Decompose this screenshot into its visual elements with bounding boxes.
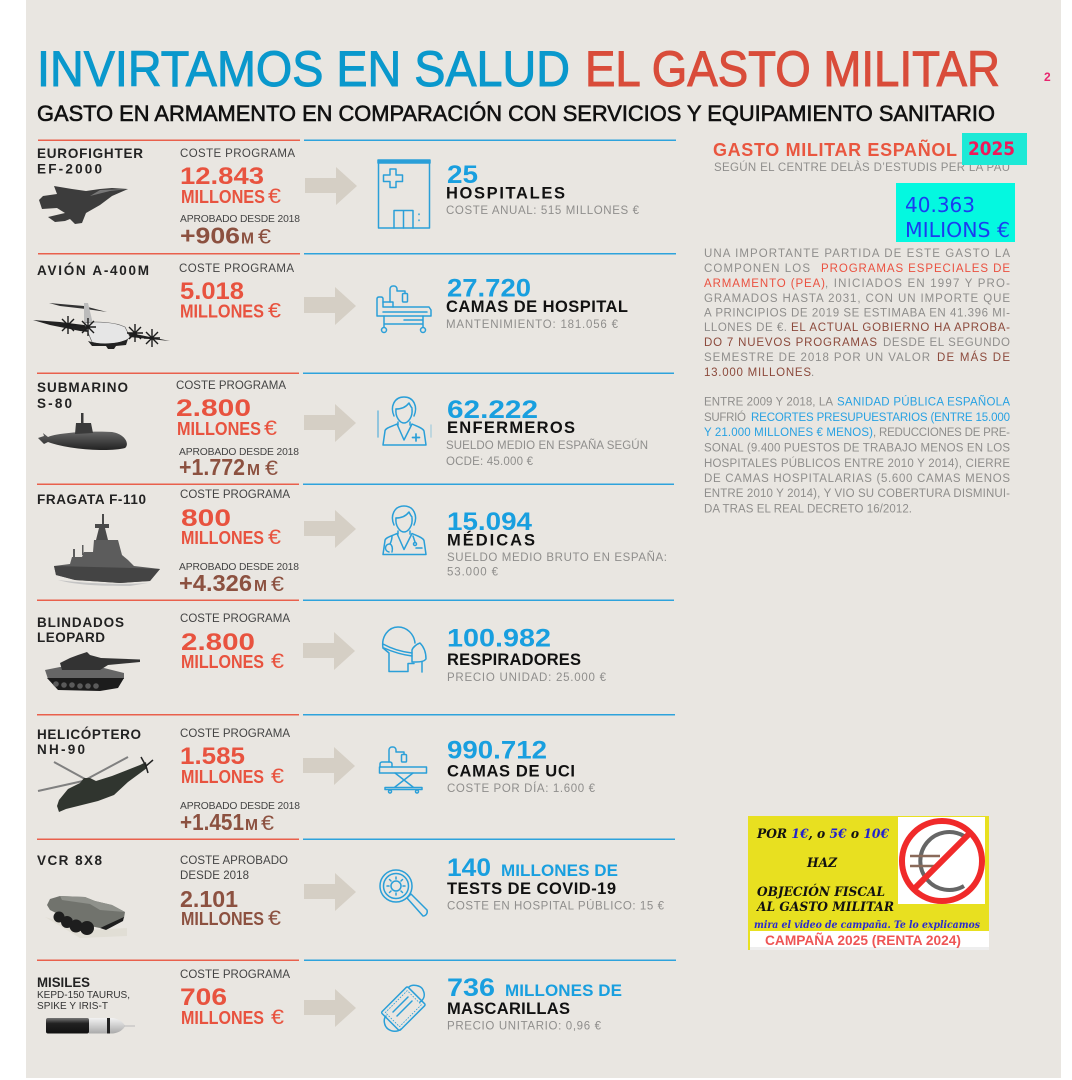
cost: €: [271, 765, 284, 788]
weapon name: LEOPARD: [37, 630, 105, 645]
cost: APROBADO DESDE 2018: [180, 801, 300, 812]
cost: [180, 855, 288, 930]
weapon name: S-80: [37, 396, 72, 411]
cost: M: [254, 578, 267, 595]
text block: PEA paragraph: DESDE EL SEGUNDO: [883, 337, 1010, 349]
row: Misiles: [37, 969, 622, 1034]
row: Eurofighter: [37, 146, 640, 248]
benefit: UCI: COSTE POR DÍA: 1.600 €: [447, 782, 596, 795]
banner text: mira el video de campaña. Te lo explicamos: [754, 920, 980, 931]
text block: PEA paragraph: .: [811, 367, 814, 379]
arrow: [304, 404, 356, 442]
arrow: [304, 989, 356, 1027]
benefit: camas: [446, 275, 628, 331]
year badge: [962, 133, 1027, 165]
weapon name: [37, 615, 124, 645]
banner text: OBJECIÓN FISCAL: [757, 883, 885, 900]
icon: hospital: [378, 160, 430, 228]
benefit: mascarillas: PRECIO UNITARIO: 0,96 €: [447, 1021, 602, 1033]
benefit: enfermeros: OCDE: 45.000 €: [446, 456, 534, 468]
cost: MILLONES: [181, 652, 264, 672]
cost: MILLONES: [180, 302, 264, 322]
cost: MILLONES: [181, 1008, 264, 1028]
title: [37, 41, 1000, 97]
year badge: 2025: [968, 138, 1015, 160]
text block: PEA paragraph: UNA IMPORTANTE PARTIDA DE ESTE GASTO LA: [704, 248, 1010, 260]
weapon name: HELICÓPTERO: [37, 727, 141, 742]
text block: PEA paragraph: PROGRAMAS ESPECIALES DE: [821, 263, 1010, 275]
cost: [180, 148, 300, 248]
weapon name: FRAGATA F-110: [37, 492, 146, 507]
banner text: AL GASTO MILITAR: [755, 900, 894, 915]
cost: €: [268, 300, 281, 322]
benefit: respiradores: RESPIRADORES: [447, 651, 581, 669]
banner: objeción fiscal: [748, 816, 989, 950]
cost: +906: [180, 222, 240, 248]
weapon name: SPIKE Y IRIS-T: [37, 1001, 108, 1012]
panel: gasto militar heading: [713, 133, 1027, 174]
cost: 12.843: [180, 163, 264, 190]
cost: +1.451: [180, 809, 244, 835]
cost: M: [241, 230, 254, 248]
cost: 2.800: [181, 629, 255, 656]
cost: €: [265, 457, 278, 480]
benefit: enfermeros: 62.222: [447, 396, 538, 424]
title: INVIRTAMOS EN SALUD: [37, 41, 570, 97]
benefit: hospitales: 25: [447, 161, 478, 189]
plane image: [33, 303, 170, 349]
row: A-400M: [33, 263, 628, 349]
cost: COSTE PROGRAMA: [180, 969, 290, 981]
cost: MILLONES: [181, 767, 264, 787]
benefit: tests: TESTS DE COVID-19: [447, 880, 616, 898]
cost: €: [271, 1006, 284, 1029]
cost: 706: [180, 984, 227, 1011]
banner text: HAZ: [806, 856, 837, 871]
weapon name: KEPD-150 TAURUS,: [37, 990, 130, 1001]
title: EL GASTO MILITAR: [585, 41, 1000, 97]
cost: [180, 613, 290, 673]
benefit: tests: 140: [447, 854, 491, 882]
text block: PEA paragraph: , INICIADOS EN 1997 Y PRO-: [825, 278, 1010, 290]
benefit: medicas: 15.094: [447, 508, 532, 536]
cost: DESDE 2018: [180, 870, 249, 882]
cost: COSTE PROGRAMA: [180, 489, 290, 501]
icon: doctor: [383, 506, 426, 554]
cost: MILLONES: [181, 528, 264, 548]
cost: [179, 489, 299, 596]
text block: sanidad paragraph: SUFRIÓ: [704, 411, 746, 424]
jet image: [39, 186, 128, 224]
benefit: mascarillas: [447, 974, 622, 1033]
callout: total spending: [896, 183, 1015, 242]
cost: 5.018: [180, 278, 244, 305]
cost: MILLONES: [177, 419, 261, 439]
arrow: [304, 287, 356, 325]
cost: [180, 728, 300, 835]
cost: €: [268, 526, 281, 549]
text block: sanidad paragraph: DE CAMAS HOSPITALARIAS (5.600 CAMAS MENOS: [704, 473, 1010, 485]
benefit: medicas: 53.000 €: [447, 567, 499, 579]
benefit: medicas: MÉDICAS: [447, 531, 535, 550]
benefit: mascarillas: 736: [447, 974, 495, 1002]
text block: PEA paragraph: COMPONEN LOS: [704, 263, 810, 275]
cost: +1.772: [179, 454, 245, 480]
arrow: [304, 510, 356, 548]
weapon name: SUBMARINO: [37, 380, 128, 395]
cost: 2.101: [180, 886, 238, 912]
benefit: tests: MILLONES DE: [501, 861, 618, 880]
cost: €: [261, 812, 274, 835]
text block: PEA paragraph: LLONES DE €.: [704, 322, 787, 334]
text block: sanidad paragraph: Y 21.000 MILLONES € MENOS): [704, 427, 873, 439]
panel: gasto militar heading: SEGÚN EL CENTRE DELÀS D’ESTUDIS PER LA PAU: [714, 161, 1010, 174]
cost: M: [247, 462, 260, 479]
cost: COSTE PROGRAMA: [180, 148, 295, 160]
callout: total spending: MILIONS €: [905, 218, 1010, 242]
weapon name: [37, 727, 141, 757]
text block: sanidad paragraph: DA TRAS EL REAL DECRETO 16/2012.: [704, 504, 912, 516]
cost: 800: [181, 505, 231, 532]
submarine image: [38, 413, 127, 450]
benefit: tests: [447, 854, 665, 913]
weapon name: VCR 8X8: [37, 853, 102, 868]
row: S-80: [37, 380, 648, 480]
cost: €: [271, 573, 284, 596]
row: VCR 8x8: [37, 853, 665, 938]
page number: 2: [1044, 70, 1051, 84]
benefit: UCI: 990.712: [447, 737, 547, 765]
cost: [179, 263, 294, 322]
cost: COSTE PROGRAMA: [180, 728, 290, 740]
cost: MILLONES: [181, 187, 265, 207]
cost: APROBADO DESDE 2018: [180, 214, 300, 225]
weapon name: AVIÓN A-400M: [37, 263, 149, 278]
icon: magnifier with virus: [380, 870, 427, 916]
icon: respirator: [383, 627, 426, 672]
text block: PEA paragraph: DE MÁS DE: [937, 351, 1010, 364]
text block: sanidad paragraph: SONAL (9.400 PUESTOS DE TRABAJO MENOS EN LOS: [704, 442, 1010, 454]
weapon name: [37, 975, 130, 1012]
weapon name: [37, 146, 143, 176]
banner text: CAMPAÑA 2025 (RENTA 2024): [765, 931, 961, 948]
callout: total spending: 40.363: [905, 193, 975, 217]
weapon name: BLINDADOS: [37, 615, 124, 630]
row: F-110: [37, 489, 667, 596]
text block: sanidad paragraph: [704, 396, 1010, 516]
benefit: respiradores: 100.982: [447, 625, 551, 653]
text block: PEA paragraph: A PRINCIPIOS DE 2019 SE ESTIMABA EN 41.396 MI-: [704, 308, 1010, 320]
weapon name: [37, 380, 128, 411]
benefit: respiradores: [447, 625, 607, 684]
tank image: [45, 652, 140, 691]
arrow: [303, 747, 355, 785]
arrow: [303, 632, 355, 670]
cost: €: [271, 650, 284, 673]
benefit: mascarillas: MILLONES DE: [505, 981, 622, 1000]
cost: 1.585: [180, 743, 245, 770]
weapon name: NH-90: [37, 742, 85, 757]
text block: sanidad paragraph: SANIDAD PÚBLICA ESPAÑOLA: [837, 396, 1010, 409]
row: NH-90: [37, 727, 596, 835]
panel: gasto militar heading: GASTO MILITAR ESPAÑOL: [713, 139, 957, 160]
arrow: [305, 167, 357, 205]
benefit: medicas: [447, 508, 667, 579]
weapon name: EF-2000: [37, 162, 102, 176]
frigate image: [54, 514, 160, 586]
cost: APROBADO DESDE 2018: [179, 447, 299, 458]
weapon name: MISILES: [37, 975, 90, 990]
text block: PEA paragraph: DO 7 NUEVOS PROGRAMAS: [704, 337, 877, 349]
benefit: tests: COSTE EN HOSPITAL PÚBLICO: 15 €: [447, 900, 665, 913]
cost: +4.326: [179, 570, 252, 596]
text block: PEA paragraph: EL ACTUAL GOBIERNO HA APROBA-: [791, 322, 1010, 334]
subtitle: GASTO EN ARMAMENTO EN COMPARACIÓN CON SERVICIOS Y EQUIPAMIENTO SANITARIO: [37, 101, 995, 126]
text block: sanidad paragraph: ENTRE 2010 Y 2014), Y VIO SU COBERTURA DISMINUI-: [704, 488, 1010, 500]
text block: PEA paragraph: [704, 248, 1010, 379]
missile image: [46, 1018, 135, 1034]
benefit: camas: 27.720: [447, 275, 531, 303]
arrow: [304, 873, 356, 911]
cost: APROBADO DESDE 2018: [179, 562, 299, 573]
cost: €: [258, 226, 271, 248]
benefit: camas: CAMAS DE HOSPITAL: [446, 298, 628, 316]
text block: PEA paragraph: ARMAMENTO (PEA): [704, 278, 825, 290]
helicopter image: [38, 757, 153, 812]
icon: no euro: [898, 817, 985, 904]
icon: face mask: [381, 985, 426, 1031]
weapon name: EUROFIGHTER: [37, 146, 143, 161]
benefit: medicas: SUELDO MEDIO BRUTO EN ESPAÑA:: [447, 551, 667, 564]
benefit: camas: MANTENIMIENTO: 181.056 €: [446, 319, 619, 331]
text block: sanidad paragraph: , REDUCCIONES DE PRE-: [873, 427, 1010, 439]
benefit: UCI: [447, 737, 596, 795]
text block: sanidad paragraph: RECORTES PRESUPUESTARIOS (ENTRE 15.000: [751, 412, 1010, 424]
icon: ICU bed: [380, 747, 426, 793]
cost: COSTE PROGRAMA: [180, 613, 290, 625]
text block: sanidad paragraph: HOSPITALES PÚBLICOS ENTRE 2010 Y 2014), CIERRE: [704, 457, 1010, 470]
cost: €: [268, 907, 281, 930]
banner text: [754, 827, 980, 948]
benefit: hospitales: [446, 161, 640, 217]
cost: COSTE PROGRAMA: [176, 380, 286, 392]
text block: PEA paragraph: 13.000 MILLONES: [704, 367, 811, 379]
cost: [176, 380, 299, 480]
benefit: enfermeros: [446, 396, 648, 468]
cost: COSTE APROBADO: [180, 855, 288, 867]
benefit: enfermeros: ENFERMEROS: [447, 419, 575, 437]
row: Leopard: [37, 613, 607, 691]
text block: PEA paragraph: GRAMADOS HASTA 2031, CON UN IMPORTE QUE: [704, 293, 1010, 305]
banner text: POR 1€, o 5€ o 10€: [756, 827, 890, 842]
benefit: hospitales: HOSPITALES: [446, 184, 565, 202]
armored vehicle image: [45, 896, 127, 938]
cost: [180, 969, 290, 1029]
benefit: respiradores: PRECIO UNIDAD: 25.000 €: [447, 672, 607, 684]
text block: PEA paragraph: SEMESTRE DE 2018 POR UN VALOR: [704, 352, 930, 364]
cost: €: [268, 185, 281, 208]
cost: COSTE PROGRAMA: [179, 263, 294, 275]
benefit: enfermeros: SUELDO MEDIO EN ESPAÑA SEGÚN: [446, 439, 648, 452]
benefit: mascarillas: MASCARILLAS: [447, 1000, 570, 1018]
benefit: hospitales: COSTE ANUAL: 515 MILLONES €: [446, 205, 640, 217]
cost: 2.800: [176, 395, 251, 422]
icon: nurse: [378, 397, 431, 445]
icon: hospital bed: [377, 286, 431, 332]
cost: €: [264, 417, 277, 440]
cost: MILLONES: [181, 909, 264, 929]
text block: sanidad paragraph: ENTRE 2009 Y 2018, LA: [704, 397, 833, 409]
benefit: UCI: CAMAS DE UCI: [447, 763, 575, 781]
cost: M: [245, 817, 258, 834]
